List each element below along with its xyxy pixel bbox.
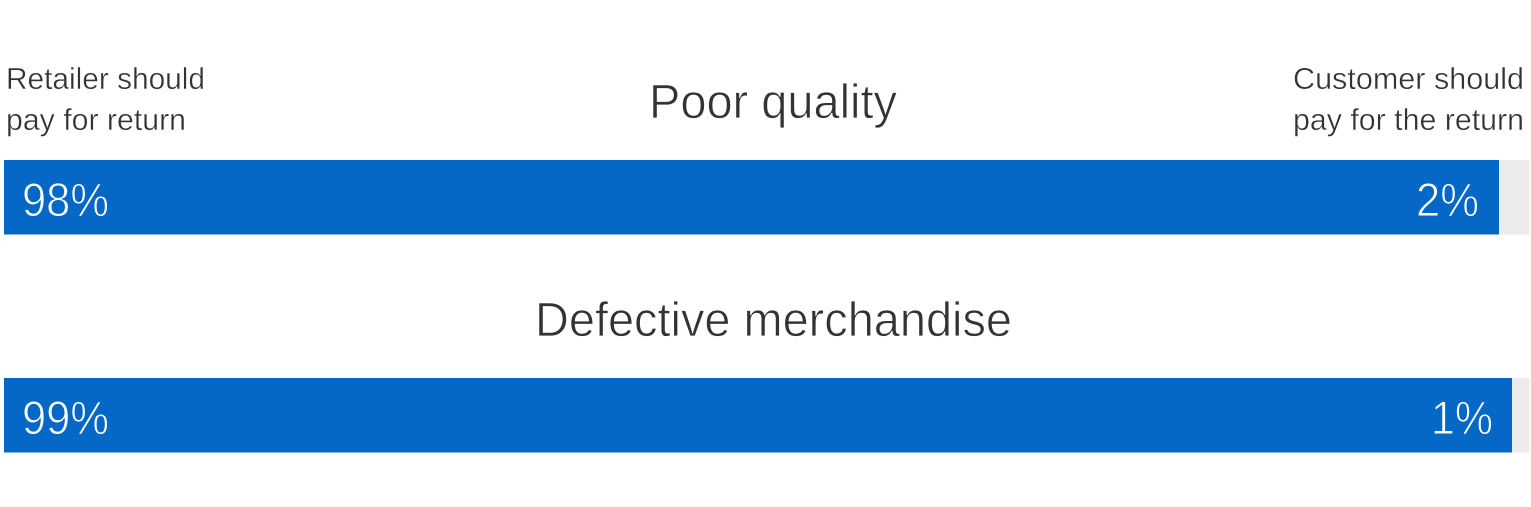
value: customer 1%: 1% (1431, 391, 1493, 444)
heading: defective merchandise: Defective merchandise (535, 294, 1012, 347)
heading: poor quality: Poor quality (649, 76, 897, 129)
legend label: retailer should pay: pay for return (6, 102, 186, 137)
value: customer 2%: 2% (1416, 173, 1479, 226)
customer segment (1499, 160, 1530, 234)
value: retailer 98%: 98% (22, 173, 109, 226)
legend label: customer should pay (1293, 61, 1524, 137)
retailer segment (4, 378, 1512, 452)
legend label: customer should pay: Customer should (1293, 61, 1524, 96)
value: retailer 99%: 99% (22, 391, 109, 444)
stacked bar: poor quality (4, 160, 1530, 234)
retailer segment (4, 160, 1499, 234)
legend label: retailer should pay (6, 61, 205, 137)
customer segment (1512, 378, 1530, 452)
stacked bar: defective merchandise (4, 378, 1530, 452)
legend label: customer should pay: pay for the return (1293, 102, 1524, 137)
legend label: retailer should pay: Retailer should (6, 61, 205, 96)
